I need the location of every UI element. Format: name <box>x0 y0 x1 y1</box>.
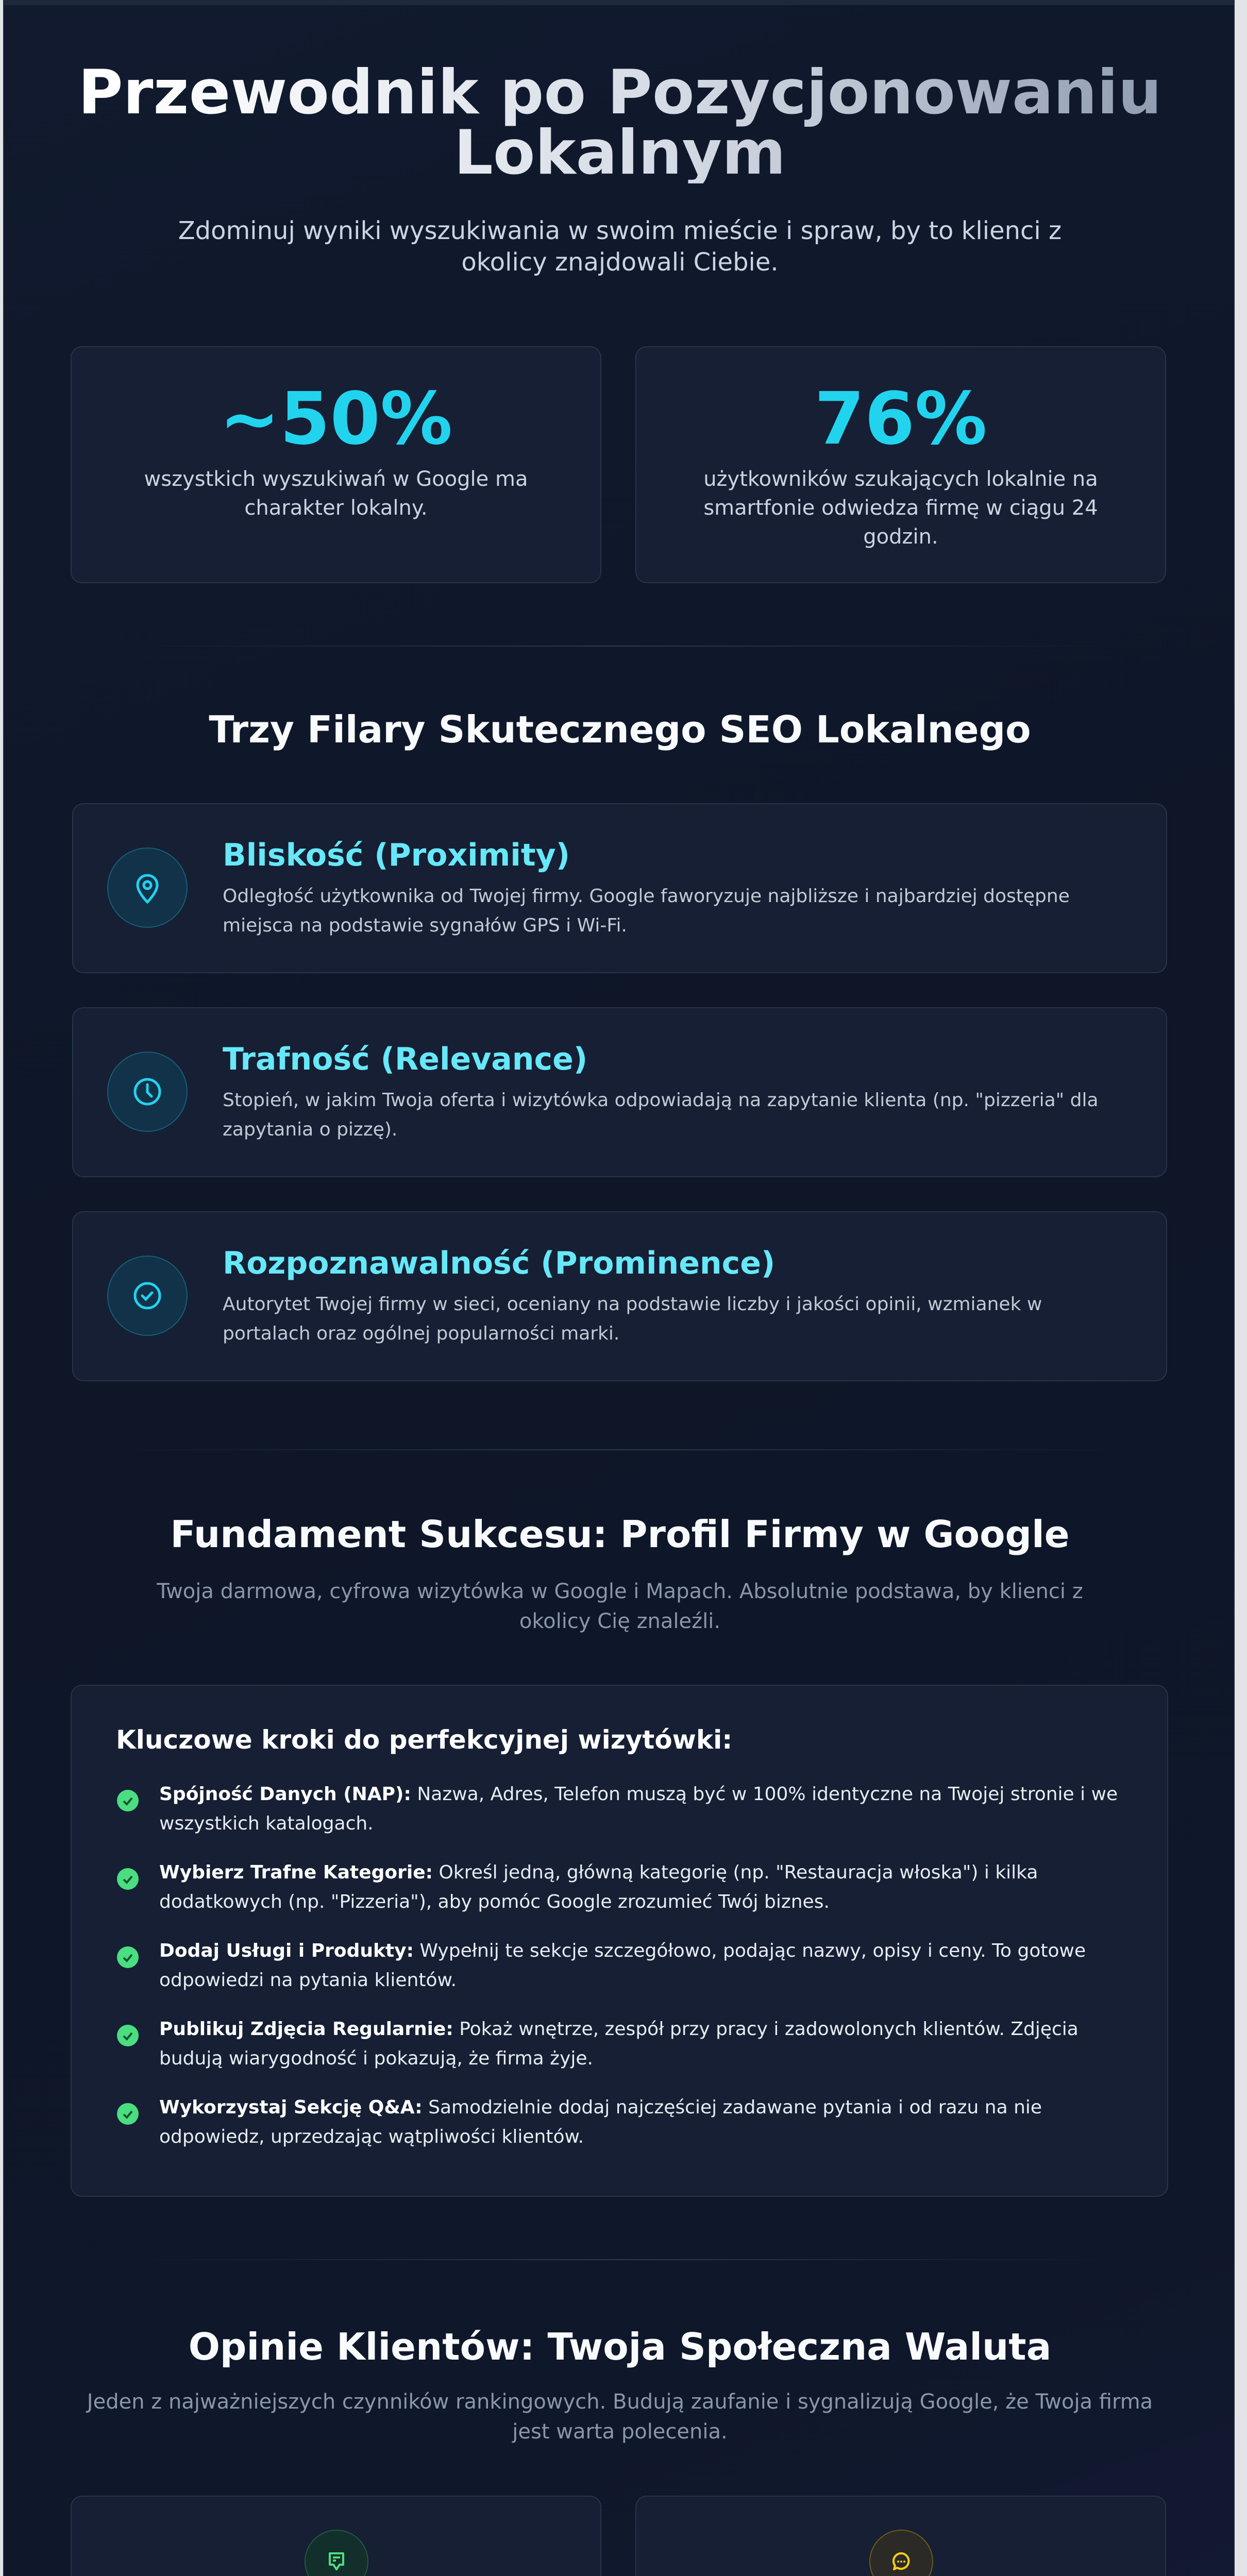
subtitle: Zdominuj wyniki wyszukiwania w swoim mieście i spraw, by to klienci z okolicy znajdowali Ciebie. <box>178 216 1061 277</box>
title: Rozpoznawalność (Prominence) <box>223 1245 775 1281</box>
icon: message <box>305 2530 368 2576</box>
heading: reviews: Opinie Klientów: Twoja Społeczna Waluta <box>189 2325 1051 2368</box>
stat card: 76% <box>635 346 1166 583</box>
panel: proximity <box>72 803 1167 973</box>
icon: location pin <box>107 848 188 928</box>
stat number: 76% <box>814 377 987 461</box>
subtitle: reviews: Jeden z najważniejszych czynników rankingowych. Budują zaufanie i sygnalizują Google, że Twoja firma jest warta polecenia. <box>87 2390 1153 2444</box>
stat number: ~50% <box>220 377 452 461</box>
heading: google profile: Fundament Sukcesu: Profil Firmy w Google <box>170 1513 1070 1556</box>
description: Odległość użytkownika od Twojej firmy. Google faworyzuje najbliższe i najbardziej dostępne miejsca na podstawie sygnałów GPS i Wi-Fi. <box>223 886 1070 936</box>
step 5: Wykorzystaj Sekcję Q&A: Samodzielnie dodaj najczęściej zadawane pytania i od razu na nie odpowiedz, uprzedzając wątpliwości klientów. <box>159 2097 1042 2147</box>
panel: ask for reviews <box>71 2496 601 2576</box>
stat card: 50% <box>71 346 601 583</box>
title <box>4 63 1236 183</box>
stat description: wszystkich wyszukiwań w Google ma charakter lokalny. <box>144 467 528 520</box>
panel heading: Kluczowe kroki do perfekcyjnej wizytówki: <box>116 1725 732 1755</box>
subtitle: google profile: Twoja darmowa, cyfrowa wizytówka w Google i Mapach. Absolutnie podstawa, by klienci z okolicy Cię znaleźli. <box>157 1580 1083 1633</box>
icon: clock <box>107 1052 188 1132</box>
panel: reply to all <box>635 2496 1166 2576</box>
panel: key steps <box>71 1685 1168 2197</box>
step 1: Spójność Danych (NAP): Nazwa, Adres, Telefon muszą być w 100% identyczne na Twojej stronie i we wszystkich katalogach. <box>159 1784 1118 1834</box>
description: Autorytet Twojej firmy w sieci, oceniany na podstawie liczby i jakości opinii, wzmianek w portalach oraz ogólnej popularności marki. <box>223 1294 1042 1344</box>
title: Przewodnik po Pozycjonowaniu <box>78 57 1161 128</box>
title: Trafność (Relevance) <box>223 1041 587 1077</box>
icon: check badge <box>107 1256 188 1336</box>
title: Lokalnym <box>454 117 786 189</box>
heading: three pillars: Trzy Filary Skutecznego SEO Lokalnego <box>209 708 1031 751</box>
panel: prominence <box>72 1211 1167 1381</box>
icon: chat bubble <box>869 2530 933 2576</box>
stat description: użytkowników szukających lokalnie na smartfonie odwiedza firmę w ciągu 24 godzin. <box>703 467 1098 549</box>
step 3: Dodaj Usługi i Produkty: Wypełnij te sekcje szczegółowo, podając nazwy, opisy i ceny. To gotowe odpowiedzi na pytania klientów. <box>159 1940 1086 1991</box>
panel: relevance <box>72 1007 1167 1177</box>
step 4: Publikuj Zdjęcia Regularnie: Pokaż wnętrze, zespół przy pracy i zadowolonych klientów. Zdjęcia budują wiarygodność i pokazują, że firma żyje. <box>159 2019 1079 2069</box>
title: Bliskość (Proximity) <box>223 837 570 873</box>
description: Stopień, w jakim Twoja oferta i wizytówka odpowiadają na zapytanie klienta (np. "pizzeria" dla zapytania o pizzę). <box>223 1090 1099 1140</box>
step 2: Wybierz Trafne Kategorie: Określ jedną, główną kategorię (np. "Restauracja włoska") i kilka dodatkowych (np. "Pizzeria"), aby pomóc Google zrozumieć Twój biznes. <box>159 1862 1038 1912</box>
